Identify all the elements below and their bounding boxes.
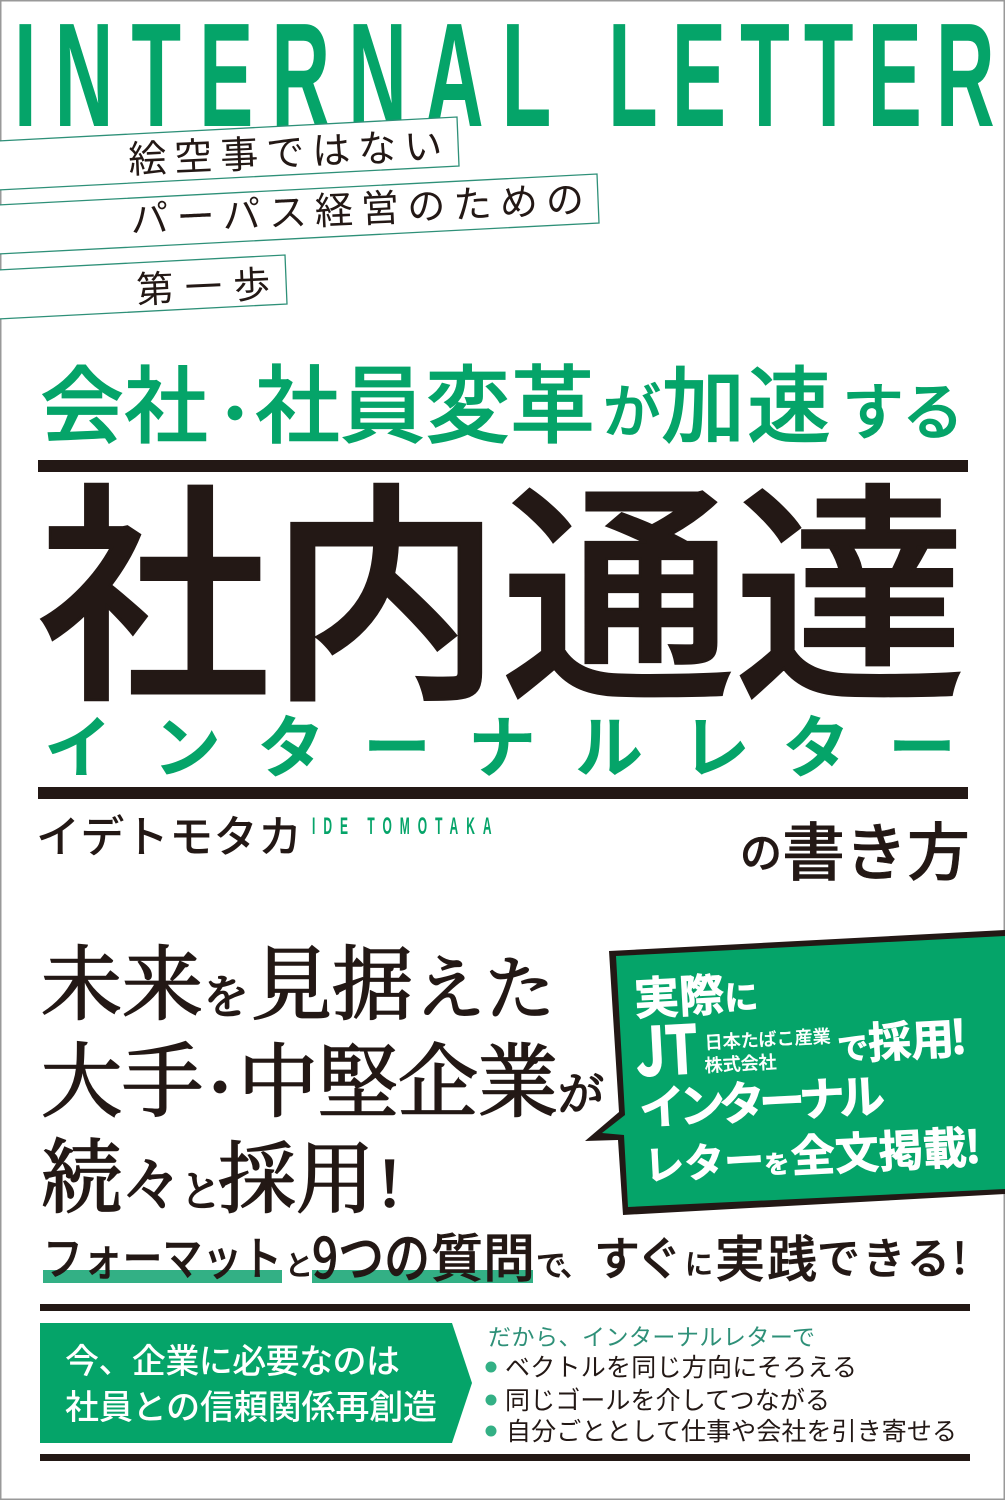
main title: 社内通達: 社内通達: [38, 411, 966, 747]
headline line 2: 中堅企業: [238, 1040, 558, 1128]
list heading: だから、インターナルレターで: [488, 1318, 815, 1352]
arrow text line 2: 社員との信頼関係再創造: [65, 1380, 437, 1429]
bullet 1: ベクトルを同じ方向にそろえる: [505, 1348, 857, 1384]
label box: パーパス経営のための: パーパス経営のための: [129, 168, 585, 244]
callout text: 日本たばこ産業: [704, 1022, 831, 1055]
tagline: フォーマットと9つの質問で、すぐに実践できる!: すぐ: [594, 1223, 682, 1289]
callout text: !: [963, 1111, 982, 1176]
subtitle: 会社・社員変革が加速する: 加速: [661, 340, 831, 461]
label box: 第一歩: [0, 254, 287, 319]
headline line 3: !: [378, 1145, 401, 1222]
callout text: 全文掲載: [789, 1112, 968, 1185]
title reading: インターナルレター: タ: [782, 693, 850, 792]
title reading: インターナルレター: ナ: [468, 693, 536, 792]
label box: 絵空事ではない: 絵空事ではない: [127, 115, 443, 184]
arrow text line 1: 今、企業に必要なのは: [65, 1334, 400, 1383]
tagline: フォーマットと9つの質問で、すぐに実践できる!: と: [285, 1244, 313, 1284]
label box: 第一歩: 第一歩: [135, 254, 271, 314]
headline line 2: 大手: [41, 1038, 203, 1128]
headline line 1: を: [203, 972, 249, 1023]
callout text: JT: [633, 997, 700, 1096]
callout text: !: [948, 1001, 969, 1068]
label box: 絵空事ではない: [0, 115, 459, 190]
callout text: を: [763, 1144, 790, 1182]
bullet 3: 自分ごととして仕事や会社を引き寄せる: [506, 1412, 957, 1448]
title reading: インターナルレター: ン: [153, 693, 221, 792]
tagline: フォーマットと9つの質問で、すぐに実践できる!: 質問: [431, 1217, 535, 1292]
headline line 3: と: [180, 1170, 222, 1216]
headline line 3: 々: [120, 1149, 184, 1220]
headline line 1: えた: [415, 952, 555, 1029]
bullet 2: 同じゴールを介してつながる: [505, 1381, 830, 1417]
headline line 1: 未来: [41, 941, 203, 1031]
title reading: インターナルレター: ル: [575, 693, 643, 792]
title reading: インターナルレター: ー: [888, 693, 956, 792]
callout text: レター: [643, 1128, 765, 1192]
headline line 1: 見据: [251, 941, 413, 1031]
title: INTERNAL LETTER: [14, 0, 1005, 158]
author: イデトモタカ: IDE TOMOTAKA: [312, 814, 500, 840]
subtitle: 会社・社員変革が加速する: 会社: [40, 340, 208, 461]
rule: below bottom panel: [40, 1454, 970, 1461]
callout text: で: [836, 1022, 869, 1069]
panel: benefits list: [486, 1318, 957, 1448]
headline line 2: が: [558, 1069, 604, 1120]
rule: above bottom panel: [40, 1304, 970, 1311]
title suffix: の書き方: の: [740, 820, 782, 881]
title reading: インターナルレター: タ: [257, 693, 325, 792]
subtitle: 会社・社員変革が加速する: が: [603, 365, 661, 449]
headline line 3: 続: [41, 1134, 122, 1224]
tagline: フォーマットと9つの質問で、すぐに実践できる!: フォーマット: [43, 1223, 282, 1289]
subtitle: 会社・社員変革が加速する: する: [842, 362, 964, 452]
tagline: tilted label boxes: [0, 115, 599, 319]
tagline: フォーマットと9つの質問で、すぐに実践できる!: 実践: [715, 1220, 817, 1292]
headline line 2: ・: [190, 1057, 250, 1123]
tagline: フォーマットと9つの質問で、すぐに実践できる!: できる!: [817, 1225, 967, 1287]
title reading: インターナルレター: ー: [363, 693, 431, 792]
title suffix: の書き方: 書き方: [782, 803, 970, 894]
panel: need arrow: [40, 1323, 472, 1443]
rule: below main title: [38, 787, 968, 799]
title reading: インターナルレター: レ: [682, 693, 750, 792]
headline line 3: 採用: [218, 1136, 374, 1223]
author: イデトモタカ: イデトモタカ: [36, 801, 302, 865]
callout: JT adoption speech bubble: [585, 930, 1005, 1215]
tagline: フォーマットと9つの質問で、すぐに実践できる!: に: [685, 1243, 713, 1283]
callout text: [632, 957, 982, 1193]
title reading: インターナルレター: イ: [44, 693, 112, 792]
subtitle: 会社・社員変革が加速する: [40, 338, 964, 461]
label box: パーパス経営のための: [0, 168, 599, 254]
subtitle: 会社・社員変革が加速する: ・: [205, 367, 265, 454]
headline: 未来を見据えた大手・中堅企業が続々と採用!: [41, 941, 604, 1224]
tagline: フォーマットと9つの質問で、すぐに実践できる!: [43, 1214, 967, 1295]
callout text: インターナル: [637, 1060, 886, 1139]
callout text: 採用: [866, 1005, 956, 1071]
tagline: フォーマットと9つの質問で、すぐに実践できる!: で、: [536, 1241, 590, 1285]
underline highlights: [43, 1270, 533, 1283]
subtitle: 会社・社員変革が加速する: 社員変革: [255, 338, 595, 461]
rule: above main title: [38, 460, 968, 472]
callout text: 実際に: [632, 957, 760, 1028]
tagline: フォーマットと9つの質問で、すぐに実践できる!: 9つの: [312, 1214, 430, 1295]
author: イデトモタカ: [36, 801, 500, 865]
callout text: 株式会社: [704, 1048, 777, 1078]
